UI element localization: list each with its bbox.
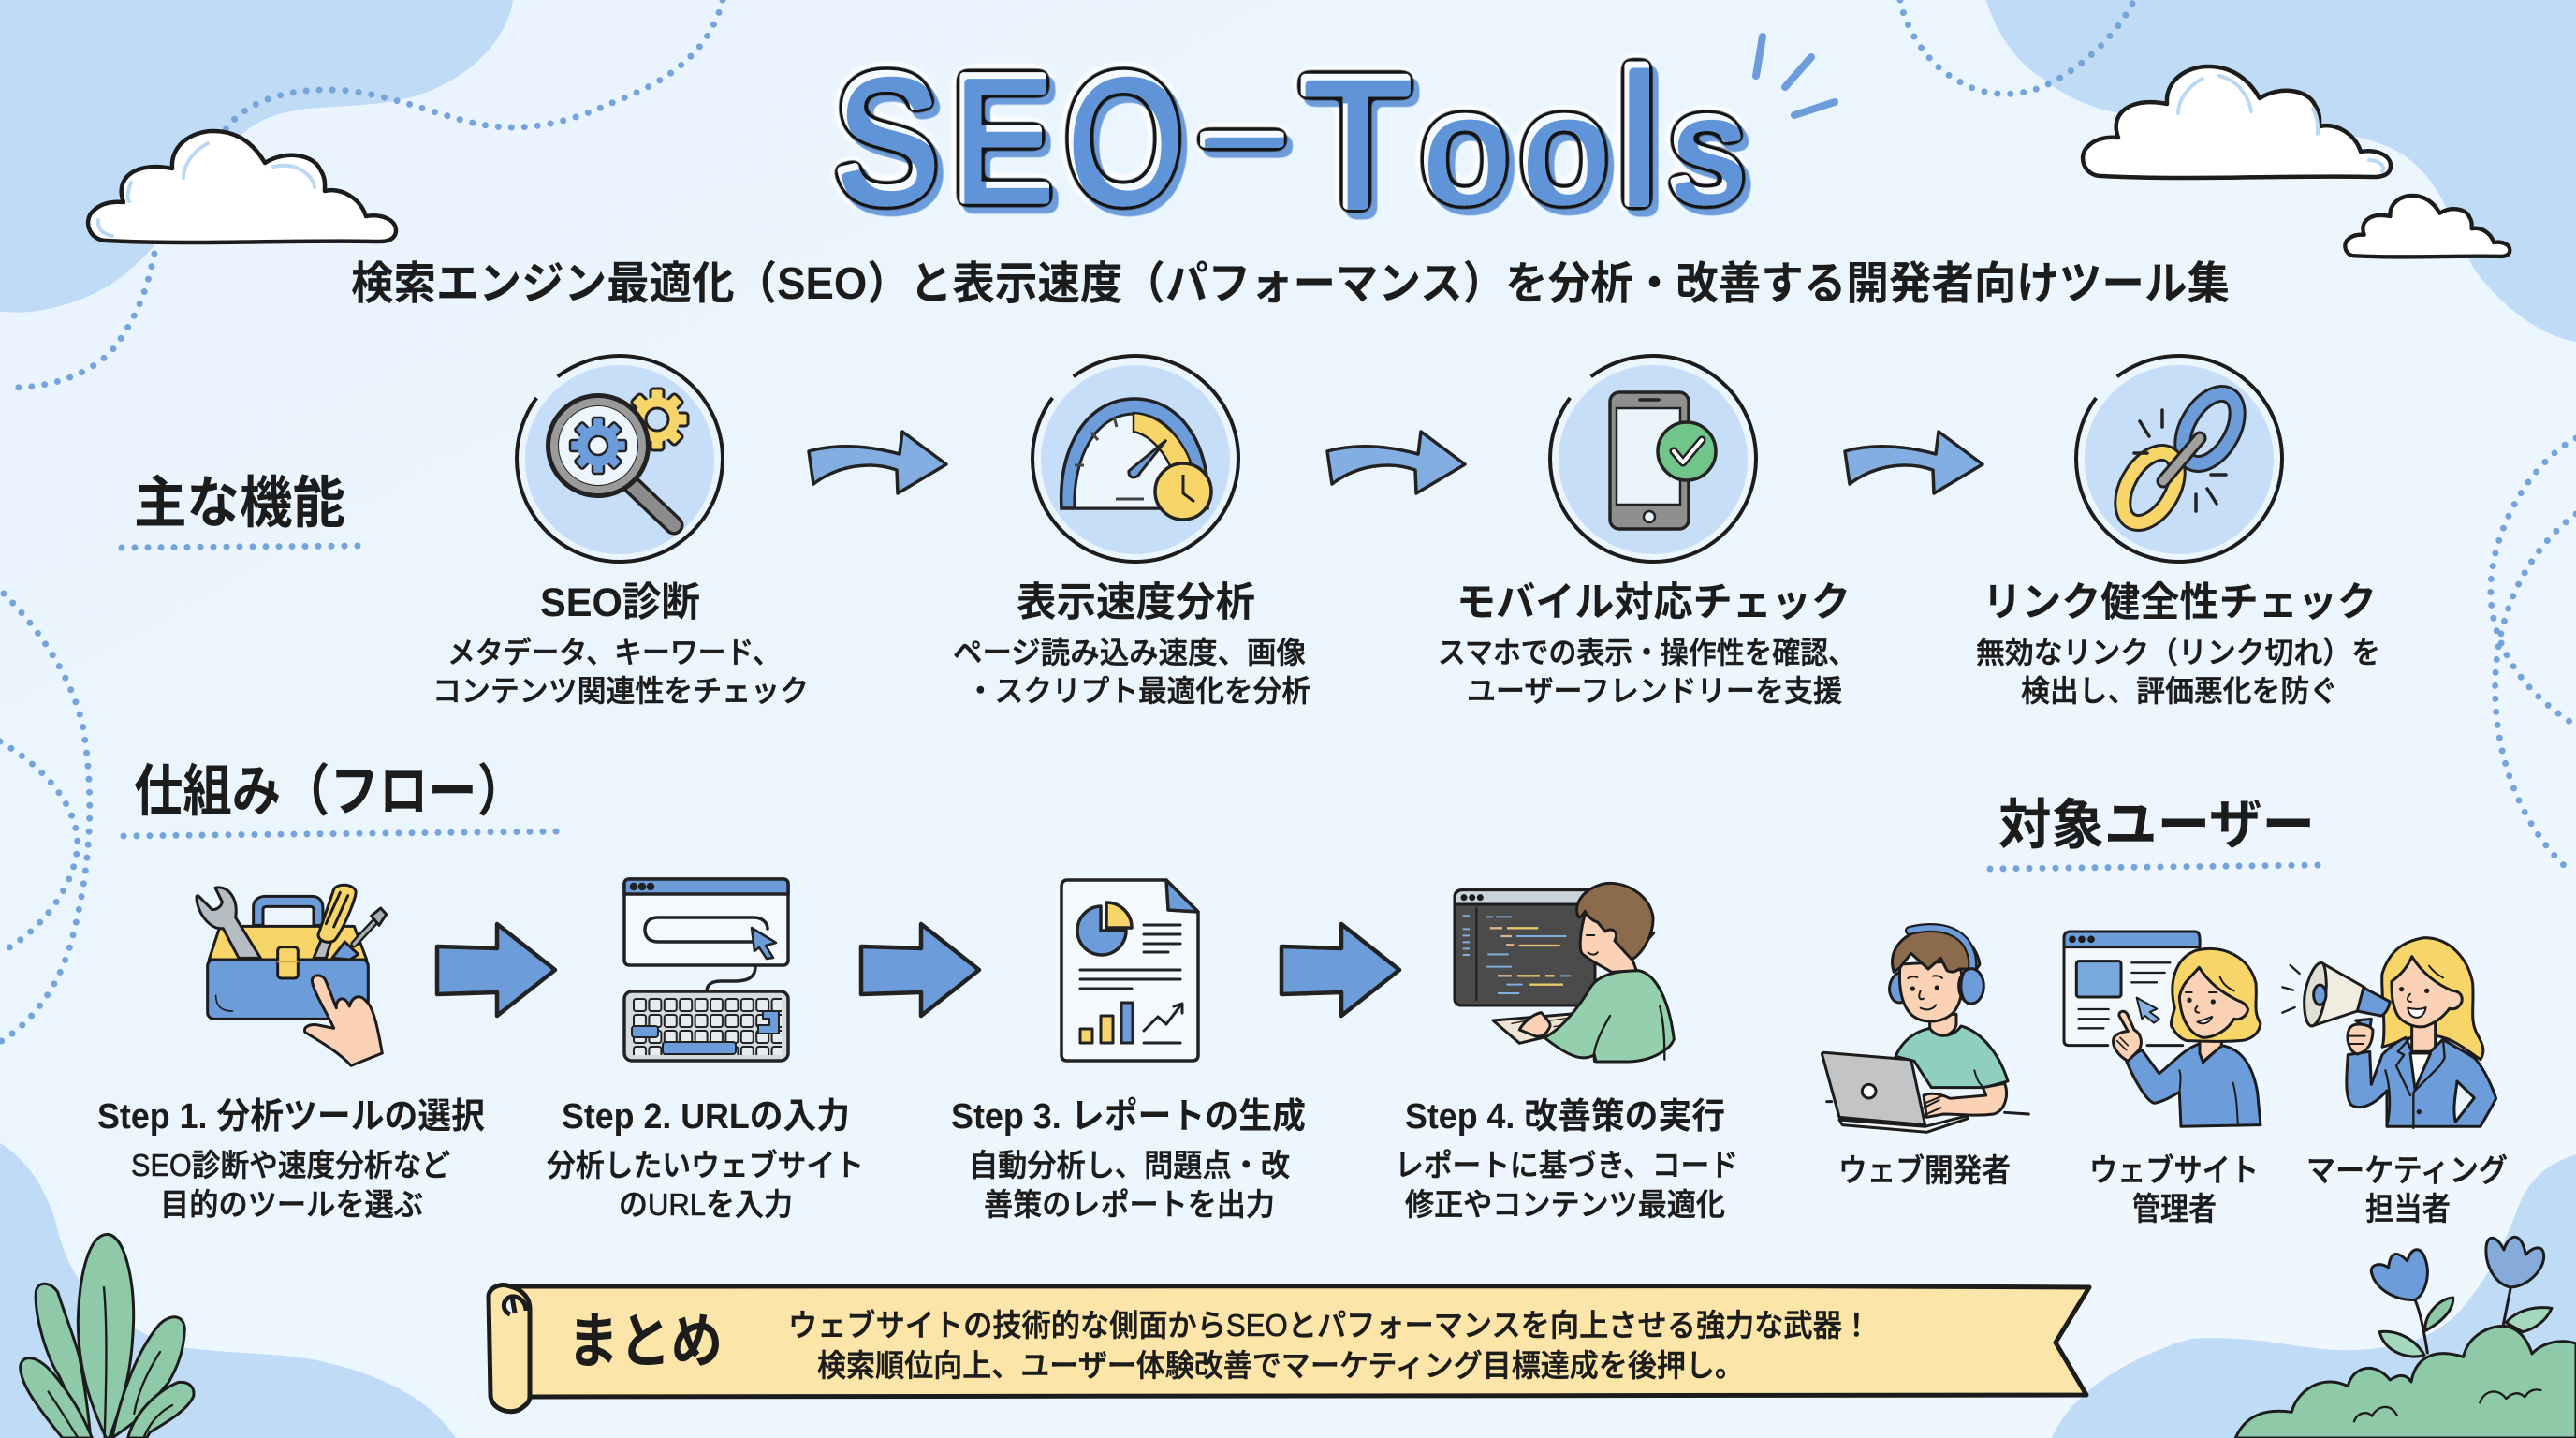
cloud: top right large [2083,66,2391,178]
blob: top right [1986,0,2576,342]
arrow: feature 1 to 2 [809,432,946,493]
feature: speed analysis [953,356,1310,708]
heading: flow: 仕組み（フロー） [134,760,526,823]
title: s [1670,60,1744,234]
feature: link check: 無効なリンク（リンク切れ）を [1976,636,2380,669]
cloud: top left [88,131,396,242]
title: O [1065,37,1181,239]
dotted curve: top left [8,0,723,388]
user: marketing: 担当者 [2365,1192,2451,1227]
user: marketing [2282,938,2508,1227]
feature: link check [1976,356,2380,708]
arrow: feature 2 to 3 [1327,432,1465,493]
feature: SEO diagnosis: メタデータ、キーワード、 [447,636,781,669]
arrow: step 2 to 3 [861,924,979,1016]
icon: phone with check [1550,356,1756,562]
summary banner [489,1284,2089,1412]
icon: woman with megaphone [2282,938,2496,1128]
icon: report document [1061,880,1198,1061]
plant: bottom right flowers and bush [2235,1237,2576,1438]
icon: chain link [2076,356,2282,562]
feature: mobile check: ユーザーフレンドリーを支援 [1467,674,1842,708]
icon: browser and keyboard [624,879,788,1061]
user: website manager: ウェブサイト [2089,1153,2259,1189]
title: l [1617,32,1657,242]
summary banner: ウェブサイトの技術的な側面からSEOとパフォーマンスを向上させる強力な武器！ [788,1308,1871,1343]
feature: SEO diagnosis [432,356,809,708]
dotted curve: right inner [2496,514,2576,871]
feature: SEO diagnosis: コンテンツ関連性をチェック [432,674,809,708]
dotted curve: left outer [0,594,90,1042]
dotted curve: right outer [2491,438,2576,726]
blob: top left [0,0,513,313]
blob: bottom left [0,1143,456,1438]
user: website manager [2064,932,2261,1227]
feature: mobile check [1438,356,1856,708]
dotted curve: left inner [0,741,78,953]
step 1: 目的のツールを選ぶ [160,1187,423,1222]
icon: speedometer and clock [1032,356,1238,562]
arrow: step 1 to 2 [437,924,555,1016]
step 1: SEO診断や速度分析など [131,1148,450,1182]
user: web developer: ウェブ開発者 [1838,1153,2011,1189]
feature: SEO diagnosis: SEO診断 [540,580,700,625]
icon: browser and woman pointing [2064,932,2261,1126]
icon: developer with headphones and laptop [1822,928,2028,1132]
title [834,32,1744,245]
title: o [1520,61,1607,234]
banner ribbon [510,1284,2089,1398]
icon: developer at monitor [1455,883,1674,1062]
icon: toolbox with hand [197,885,387,1065]
blob: bottom right [2052,1154,2576,1438]
cloud: top right small [2345,196,2510,257]
step 3: 善策のレポートを出力 [984,1187,1275,1222]
title: S [834,37,938,240]
plant: bottom left [21,1234,194,1438]
title: T [1301,39,1410,245]
user: website manager: 管理者 [2132,1192,2217,1227]
icon: magnifier and gears [517,356,723,562]
step 4: 修正やコンテンツ最適化 [1405,1187,1725,1222]
feature: mobile check: スマホでの表示・操作性を確認、 [1438,636,1856,669]
feature: link check: リンク健全性チェック [1983,580,2377,625]
step 1: Step 1. 分析ツールの選択 [97,1097,485,1137]
arrow: step 3 to 4 [1281,924,1399,1016]
title: o [1421,61,1508,234]
step 1 [97,885,485,1222]
step 4: レポートに基づき、コード [1395,1148,1738,1182]
arrow: feature 3 to 4 [1845,432,1983,493]
step 2 [547,879,864,1222]
step 4: Step 4. 改善策の実行 [1405,1097,1725,1137]
step 4 [1395,883,1738,1222]
user: web developer [1822,928,2028,1189]
summary banner: まとめ [567,1308,723,1375]
feature: speed analysis: ・スクリプト最適化を分析 [966,674,1310,708]
feature: speed analysis: 表示速度分析 [1017,580,1255,625]
step 2: のURLを入力 [619,1187,793,1222]
step 3: 自動分析し、問題点・改 [969,1148,1290,1182]
heading: target users: 対象ユーザー [1998,795,2315,856]
step 3 [951,880,1306,1222]
title sparkle marks [1756,37,1835,115]
summary banner: 検索順位向上、ユーザー体験改善でマーケティング目標達成を後押し。 [817,1348,1744,1383]
step 3: Step 3. レポートの生成 [951,1097,1306,1137]
title: - [1194,53,1290,204]
heading: main features: 主な機能 [134,472,345,535]
banner scroll curl [489,1285,530,1412]
step 2: Step 2. URLの入力 [562,1097,850,1137]
title: E [951,39,1052,238]
step 2: 分析したいウェブサイト [547,1148,864,1182]
user: marketing: マーケティング [2306,1153,2508,1189]
subtitle: 検索エンジン最適化（SEO）と表示速度（パフォーマンス）を分析・改善する開発者向けツール集 [351,259,2230,309]
dotted curve: top right [1900,0,2134,94]
feature: speed analysis: ページ読み込み速度、画像 [953,636,1306,669]
feature: link check: 検出し、評価悪化を防ぐ [2021,674,2338,708]
feature: mobile check: モバイル対応チェック [1456,580,1851,625]
